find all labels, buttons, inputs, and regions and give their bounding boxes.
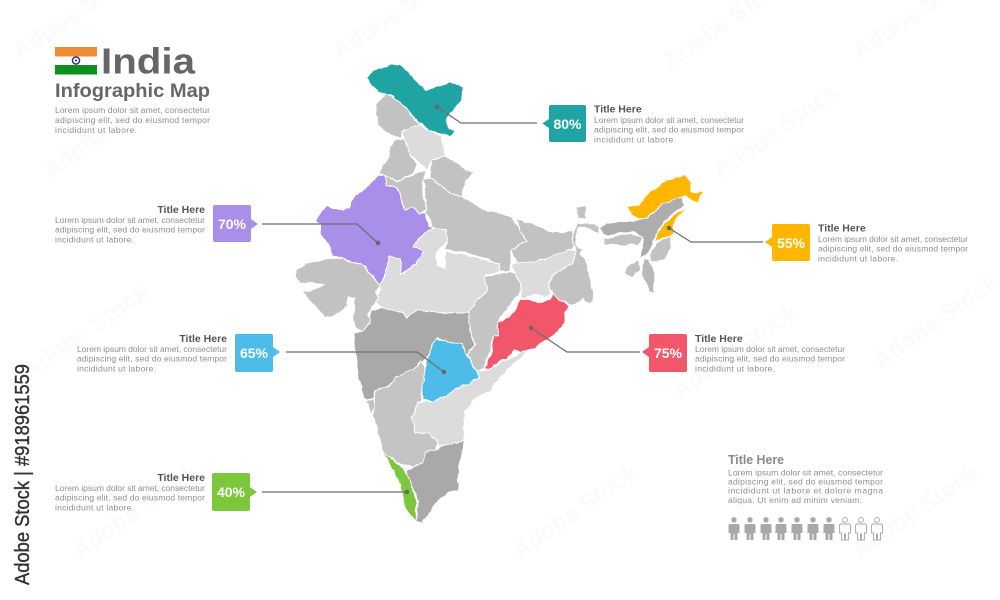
callout: 65 percent: Lorem ipsum dolor sit amet, consectetur — [77, 344, 227, 354]
title: India: India — [101, 40, 196, 82]
callout: 40 percent: incididunt ut labore. — [55, 502, 134, 512]
label text: Title Here — [157, 472, 205, 484]
callout: 55 percent: incididunt ut labore. — [818, 254, 898, 264]
leader line — [262, 491, 407, 493]
badge — [213, 205, 258, 242]
intro text: incididunt ut labore. — [55, 125, 137, 135]
region: Haryana — [385, 171, 427, 213]
watermark pattern: Adobe Stock — [38, 78, 174, 185]
watermark pattern: Adobe Stock — [868, 268, 1000, 375]
intro text: Lorem ipsum dolor sit amet, consectetur — [55, 105, 210, 115]
callout: 40 percent — [55, 472, 409, 512]
callout: 70 percent: incididunt ut labore. — [55, 234, 134, 244]
leader line — [262, 224, 378, 243]
label text: Title Here — [594, 104, 642, 116]
region: Tripura — [625, 259, 641, 278]
pictogram: 7 of 10 people — [728, 517, 882, 540]
region: Sikkim — [577, 205, 587, 218]
region: Madhya Pradesh — [375, 227, 500, 318]
intro text: adipiscing elit, sed do eiusmod tempor — [55, 115, 210, 125]
note panel bottom right — [728, 453, 883, 540]
label text: Title Here — [157, 204, 205, 216]
region: Chhattisgarh — [467, 273, 522, 372]
watermark pattern: Adobe Stock — [668, 298, 804, 405]
region: Uttar Pradesh — [423, 178, 527, 272]
watermark pattern: Adobe Stock — [848, 458, 984, 565]
callout: 75 percent: adipiscing elit, sed do eiusmod tempor — [695, 354, 845, 364]
watermark pattern: Adobe Stock — [708, 78, 844, 185]
callout: 70 percent: 70% — [218, 216, 247, 232]
region: Himachal Pradesh — [403, 126, 445, 170]
watermark pattern: Adobe Stock — [68, 458, 204, 565]
region: Tamil Nadu — [405, 441, 465, 523]
region: Bihar — [512, 218, 577, 263]
callout: 80 percent — [435, 104, 744, 144]
leader line — [437, 107, 537, 123]
callout: 80 percent: adipiscing elit, sed do eiusmod tempor — [594, 124, 744, 134]
note text: Lorem ipsum dolor sit amet, consectetur — [728, 468, 883, 478]
region: Arunachal Pradesh highlighted — [627, 175, 703, 218]
region: West Bengal — [548, 222, 600, 305]
callout: 80 percent: Lorem ipsum dolor sit amet, consectetur — [594, 115, 744, 125]
callout: 65 percent: incididunt ut labore. — [77, 364, 156, 374]
callout: 65 percent: adipiscing elit, sed do eiusmod tempor — [77, 354, 227, 364]
note heading: Title Here — [728, 453, 784, 467]
region: Assam — [600, 197, 685, 258]
region: Ladakh and Kashmir highlighted — [366, 65, 463, 137]
leader line — [669, 228, 763, 242]
region: Uttarakhand — [430, 157, 473, 197]
callout: 75 percent: incididunt ut labore. — [695, 364, 775, 374]
icon: Indian flag — [55, 47, 97, 74]
callout: 70 percent: Lorem ipsum dolor sit amet, consectetur — [55, 215, 205, 225]
leader line — [286, 352, 444, 372]
label text: Title Here — [179, 333, 227, 345]
callout: 55 percent — [667, 222, 968, 264]
region: Nagaland highlighted — [653, 207, 687, 242]
label text: Title Here — [818, 222, 866, 234]
watermark pattern: Adobe Stock — [18, 278, 154, 385]
label text: Title Here — [695, 333, 743, 345]
region: Kerala highlighted — [382, 451, 417, 522]
badge — [765, 224, 810, 261]
region: Mizoram — [642, 258, 655, 293]
region: Meghalaya — [603, 233, 643, 245]
region: Andhra Pradesh — [412, 350, 530, 447]
map of India — [296, 65, 703, 523]
region: Goa — [365, 400, 375, 414]
callout: 70 percent — [55, 204, 380, 245]
callout: 75 percent: 75% — [654, 345, 683, 361]
callout: 40 percent: 40% — [217, 484, 246, 500]
badge — [542, 105, 586, 142]
region: Karnataka — [373, 360, 438, 467]
callout: 55 percent: Lorem ipsum dolor sit amet, consectetur — [818, 234, 968, 244]
callout: 80 percent: 80% — [553, 116, 582, 132]
note text: incididunt ut labore et dolore magna — [728, 486, 883, 496]
callout: 40 percent: adipiscing elit, sed do eiusmod tempor — [55, 492, 205, 502]
region: Telangana highlighted — [422, 338, 480, 402]
badge — [642, 334, 687, 372]
callout: 75 percent — [529, 326, 845, 374]
subtitle: Infographic Map: Infographic Map — [55, 80, 210, 102]
callout: 65 percent — [77, 333, 446, 374]
region: Punjab — [378, 140, 418, 182]
region: Manipur — [650, 235, 672, 262]
callout: 80 percent: incididunt ut labore. — [594, 134, 676, 144]
region: Maharashtra — [353, 308, 475, 400]
badge — [212, 473, 257, 511]
callout: 70 percent: adipiscing elit, sed do eiusmod tempor — [55, 224, 205, 234]
region: Rajasthan highlighted — [315, 176, 435, 285]
intro text — [55, 105, 210, 135]
region: Jammu and Kashmir lower — [376, 94, 422, 138]
callout: 55 percent: 55% — [777, 235, 806, 251]
region: Jharkhand — [512, 250, 576, 298]
callout: 55 percent: adipiscing elit, sed do eiusmod tempor — [818, 244, 968, 254]
callout: 40 percent: Lorem ipsum dolor sit amet, consectetur — [55, 483, 205, 493]
note text — [728, 468, 883, 505]
header block — [55, 40, 210, 135]
note text: aliqua. Ut enim ad minim veniam. — [728, 495, 862, 505]
region: Gujarat — [296, 257, 380, 332]
note text: adipiscing elit, sed do eiusmod tempor — [728, 476, 883, 486]
stock credit: Adobe Stock | #918961559 — [12, 364, 34, 585]
watermark pattern: Adobe Stock — [508, 458, 644, 565]
callout: 75 percent: Lorem ipsum dolor sit amet, consectetur — [695, 344, 845, 354]
region: Odisha highlighted — [484, 293, 570, 369]
callout: 65 percent: 65% — [240, 345, 269, 361]
badge — [235, 334, 280, 372]
leader line — [531, 328, 640, 352]
